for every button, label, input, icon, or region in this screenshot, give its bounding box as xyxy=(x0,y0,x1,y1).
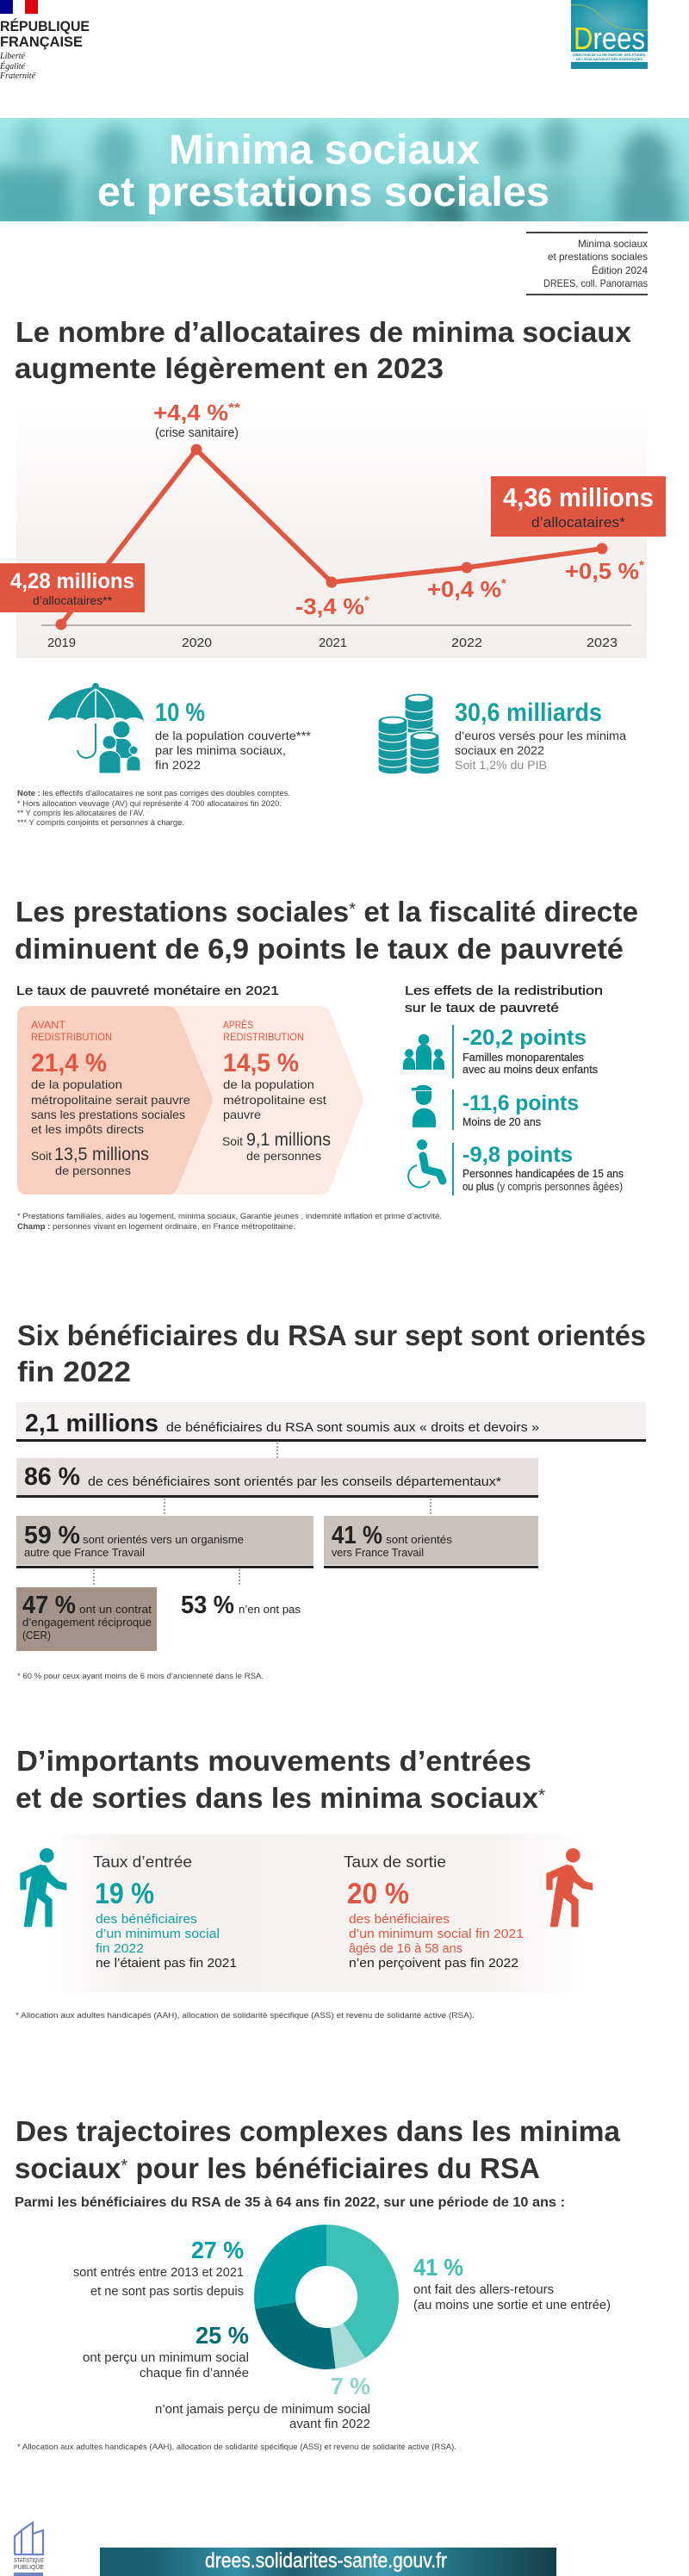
annotation: 2020 change: ** xyxy=(228,400,240,415)
flow: 41 % box xyxy=(324,1516,538,1568)
annotation: 2023 change: * xyxy=(639,558,644,573)
entry rate text: des bénéficiaires xyxy=(96,1913,197,1927)
label: 7 %: avant fin 2022 xyxy=(289,2418,370,2431)
heading: section 4: * xyxy=(538,1786,545,1805)
panel: before redistribution chevron: et les impôts directs xyxy=(31,1122,144,1136)
entry rate text: d’un minimum social xyxy=(96,1927,220,1941)
effect: under 20: Moins de 20 ans xyxy=(462,1116,541,1128)
icon: umbrella and family xyxy=(48,683,144,773)
footer: website banner: drees.solidarites-sante.gouv.fr xyxy=(205,2549,447,2573)
panel: before redistribution chevron: 13,5 millions xyxy=(54,1145,149,1164)
panel: after redistribution chevron: pauvre xyxy=(223,1108,261,1121)
label: 25 %: 25 % xyxy=(196,2322,249,2349)
panel: after redistribution chevron: 9,1 millions xyxy=(246,1130,331,1150)
notes: section 1: Note : les effectifs d’allocataires ne sont pas corrigés des doubles comptes. xyxy=(17,789,290,798)
effect: single-parent families: avec au moins deux enfants xyxy=(462,1064,598,1076)
publication reference block: et prestations sociales xyxy=(548,251,648,263)
stat: 10 % population covered: de la population couverte*** xyxy=(155,729,312,742)
heading: section 1 xyxy=(15,316,632,384)
flow: 59 % box: sont orientés vers un organisme xyxy=(83,1534,244,1546)
note: section 3: * 60 % pour ceux ayant moins de 6 mois d’ancienneté dans le RSA. xyxy=(17,1672,264,1681)
note: section 5: * Allocation aux adultes handicapés (AAH), allocation de solidarité spécifique (ASS) et revenu de solidarité active (RSA). xyxy=(17,2443,456,2452)
panel: entry and exit rates xyxy=(20,1834,593,1992)
panel: before redistribution chevron: de personnes xyxy=(55,1164,131,1177)
header: Drees logo: DE L'ÉVALUATION ET DES STATISTIQUES xyxy=(576,57,643,61)
heading: section 3: Six bénéficiaires du RSA sur sept sont orientés xyxy=(17,1319,646,1351)
panel: before redistribution chevron: AVANT xyxy=(31,1019,66,1031)
flow: 2,1 millions box xyxy=(16,1402,646,1442)
publication reference block: Édition 2024 xyxy=(592,264,648,276)
stat: 10 % population covered xyxy=(155,698,312,772)
effect: under 20 xyxy=(412,1085,579,1130)
callout: 2019 value xyxy=(0,563,145,612)
publication reference block: Minima sociaux xyxy=(578,238,648,250)
annotation: 2021 change: -3,4 % xyxy=(295,593,364,619)
entry rate text xyxy=(93,1853,237,1971)
line chart: number of recipients 2019-2023: 2020 xyxy=(182,636,212,650)
flow: 2,1 millions box: 2,1 millions xyxy=(25,1410,158,1437)
panel: after redistribution chevron: de la population xyxy=(223,1077,314,1091)
stat: 10 % population covered: fin 2022 xyxy=(155,758,201,772)
heading: section 3 xyxy=(17,1319,646,1387)
label: 27 %: sont entrés entre 2013 et 2021 xyxy=(73,2266,244,2280)
heading: section 4: et de sorties dans les minima sociaux xyxy=(16,1782,525,1814)
heading: section 5: sociaux xyxy=(15,2152,121,2184)
heading: section 1: Le nombre d’allocataires de minima sociaux xyxy=(16,316,632,348)
exit rate text: âgés de 16 à 58 ans xyxy=(349,1942,462,1956)
label: 7 % xyxy=(155,2373,370,2431)
label: 25 %: ont perçu un minimum social xyxy=(83,2351,249,2365)
label: 41 %: (au moins une sortie et une entrée) xyxy=(413,2299,611,2312)
heading: section 1: augmente légèrement en 2023 xyxy=(15,352,444,384)
label: 27 % xyxy=(73,2237,244,2299)
notes: section 1 xyxy=(17,789,290,828)
header: République française logo: RÉPUBLIQUE xyxy=(0,18,90,34)
effect: single-parent families: Familles monoparentales xyxy=(462,1052,584,1064)
panel: after redistribution chevron: Soit xyxy=(222,1134,243,1148)
donut chart: trajectories xyxy=(254,2225,399,2369)
notes: section 2: * Prestations familiales, aides au logement, minima sociaux, Garantie jeunes , indemnité inflation et prime d’activité. xyxy=(17,1212,442,1221)
annotation: 2021 change: * xyxy=(364,593,369,608)
flow: 86 % box: de ces bénéficiaires sont orientés par les conseils départementaux* xyxy=(88,1475,501,1489)
annotation: 2022 change: +0,4 % xyxy=(427,576,501,602)
stat: 10 % population covered: 10 % xyxy=(155,698,205,727)
flow: 59 % box: 59 % xyxy=(24,1522,80,1549)
exit rate text: 20 % xyxy=(347,1878,409,1910)
panel: before redistribution chevron: sans les prestations sociales xyxy=(31,1108,185,1121)
header: Drees logo: Drees xyxy=(574,21,645,56)
panel: after redistribution chevron: métropolitaine est xyxy=(223,1093,326,1107)
line chart: number of recipients 2019-2023: 2023 xyxy=(587,636,618,650)
heading: section 2: et la fiscalité directe xyxy=(356,896,638,928)
publication reference block xyxy=(526,232,648,295)
header: République française logo: Égalité xyxy=(0,61,26,71)
entry rate text: fin 2022 xyxy=(96,1942,144,1956)
header: République française logo: FRANÇAISE xyxy=(0,34,83,50)
exit rate text: Taux de sortie xyxy=(344,1853,446,1871)
heading: section 5 xyxy=(15,2115,621,2184)
effect: single-parent families xyxy=(403,1025,598,1078)
annotation: 2020 change xyxy=(153,400,240,440)
flow: 86 % box xyxy=(16,1458,538,1498)
flow: 59 % box xyxy=(16,1516,313,1568)
stat: 30,6 milliards xyxy=(455,698,626,772)
line chart: number of recipients 2019-2023 xyxy=(0,400,666,658)
label: 7 %: n’ont jamais perçu de minimum social xyxy=(155,2403,370,2417)
title banner xyxy=(0,116,689,228)
icon: walker entering xyxy=(20,1848,66,1927)
heading: section 4 xyxy=(16,1745,545,1814)
heading: section 5: * xyxy=(121,2157,127,2176)
panel: after redistribution chevron: APRÈS xyxy=(223,1018,253,1031)
subheading: section 5: Parmi les bénéficiaires du RSA de 35 à 64 ans fin 2022, sur une période de 10 ans : xyxy=(15,2195,565,2210)
exit rate text: n’en perçoivent pas fin 2022 xyxy=(349,1957,518,1971)
flow: 47 % box: d’engagement réciproque xyxy=(22,1617,152,1629)
panel: before redistribution chevron: Soit xyxy=(31,1149,52,1163)
subheading: redistribution effects xyxy=(405,984,603,1015)
icon: walker leaving xyxy=(546,1848,593,1927)
annotation: 2020 change: +4,4 % xyxy=(153,400,228,425)
entry rate text: 19 % xyxy=(95,1878,154,1910)
flow: 47 % box: ont un contrat xyxy=(79,1604,152,1616)
annotation: 2020 change: (crise sanitaire) xyxy=(155,425,239,440)
publication reference block: DREES, coll. Panoramas xyxy=(543,277,648,289)
panel: before redistribution chevron: REDISTRIBUTION xyxy=(31,1031,112,1043)
flow: 59 % box: autre que France Travail xyxy=(24,1547,145,1559)
heading: section 4: D’importants mouvements d’entrées xyxy=(16,1745,531,1777)
annotation: 2023 change: +0,5 % xyxy=(565,558,639,584)
line chart: number of recipients 2019-2023: 2021 xyxy=(319,636,347,650)
panel: before redistribution chevron xyxy=(17,1006,212,1195)
heading: section 2 xyxy=(15,896,638,965)
exit rate text xyxy=(344,1853,524,1971)
logo: statistique publique xyxy=(14,2523,44,2576)
exit rate text: des bénéficiaires xyxy=(349,1913,450,1927)
header: République française logo: Liberté xyxy=(0,51,26,61)
panel: after redistribution chevron: 14,5 % xyxy=(223,1049,299,1077)
effect: disabled people xyxy=(408,1139,624,1195)
label: 7 %: 7 % xyxy=(331,2373,370,2399)
title banner: et prestations sociales xyxy=(97,170,549,215)
effect: disabled people: ou plus (y compris personnes âgées) xyxy=(462,1181,623,1193)
callout: 2023 value: 4,36 millions xyxy=(503,482,654,512)
annotation: 2022 change: * xyxy=(501,576,506,591)
logo: statistique publique: PUBLIQUE xyxy=(14,2565,44,2571)
flow: 41 % box: sont orientés xyxy=(386,1534,452,1546)
label: 25 % xyxy=(83,2322,249,2380)
panel: before redistribution chevron: de la population xyxy=(31,1077,122,1091)
notes: section 2: Champ : personnes vivant en logement ordinaire, en France métropolitaine. xyxy=(17,1222,295,1232)
label: 27 %: et ne sont pas sortis depuis xyxy=(90,2285,244,2299)
panel: after redistribution chevron: REDISTRIBUTION xyxy=(223,1031,304,1043)
flow: 86 % box: 86 % xyxy=(24,1463,80,1491)
flow: 47 % box: (CER) xyxy=(22,1629,51,1642)
notes: section 1: ** Y compris les allocataires de l’AV. xyxy=(17,809,145,818)
line chart: number of recipients 2019-2023: 2019 xyxy=(47,636,76,650)
note: section 4: * Allocation aux adultes handicapés (AAH), allocation de solidarité spécifique (ASS) et revenu de solidarité active (RSA). xyxy=(16,2011,475,2020)
flow: 53 % text: 53 % xyxy=(181,1592,234,1619)
logo: statistique publique: STATISTIQUE xyxy=(14,2558,44,2564)
label: 25 %: chaque fin d’année xyxy=(140,2367,249,2380)
notes: section 2 xyxy=(17,1212,442,1232)
entry rate text: Taux d’entrée xyxy=(93,1853,192,1871)
callout: 2023 value xyxy=(491,476,666,537)
effect: disabled people: Personnes handicapées de 15 ans xyxy=(462,1168,624,1180)
effect: disabled people: -9,8 points xyxy=(462,1143,573,1167)
panel: after redistribution chevron xyxy=(17,1006,363,1195)
flow: 41 % box: 41 % xyxy=(332,1522,382,1549)
stat: 30,6 milliards: sociaux en 2022 xyxy=(455,743,544,757)
heading: section 2: diminuent de 6,9 points le taux de pauvreté xyxy=(15,933,624,965)
icon: coin stacks xyxy=(378,693,439,774)
header: République française logo: Fraternité xyxy=(0,71,36,81)
footer: website banner xyxy=(100,2548,556,2576)
subheading: redistribution effects: sur le taux de pauvreté xyxy=(405,1001,559,1015)
effect: under 20: -11,6 points xyxy=(462,1091,579,1115)
header: République française logo xyxy=(0,0,90,81)
panel: before redistribution chevron: métropolitaine serait pauvre xyxy=(31,1093,190,1107)
flow: 53 % text: n’en ont pas xyxy=(239,1604,301,1616)
flow: 53 % text xyxy=(181,1592,301,1619)
subheading: redistribution effects: Les effets de la redistribution xyxy=(405,984,603,998)
callout: 2019 value: d’allocataires** xyxy=(33,593,113,607)
flow: 2,1 millions box: de bénéficiaires du RSA sont soumis aux « droits et devoirs » xyxy=(166,1421,539,1435)
notes: section 1: *** Y compris conjoints et personnes à charge. xyxy=(17,818,184,828)
stat: 30,6 milliards: 30,6 milliards xyxy=(455,698,602,727)
title banner: Minima sociaux xyxy=(169,127,480,173)
header: Drees logo: DIRECTION DE LA RECHERCHE, DES ÉTUDES, xyxy=(573,53,646,57)
heading: section 2: Les prestations sociales xyxy=(16,896,345,928)
label: 41 %: ont fait des allers-retours xyxy=(413,2283,554,2297)
stat: 30,6 milliards: Soit 1,2% du PIB xyxy=(455,758,547,772)
flow: 47 % box xyxy=(16,1587,157,1651)
entry rate text: ne l’étaient pas fin 2021 xyxy=(96,1957,237,1971)
subheading: poverty rate: Le taux de pauvreté monétaire en 2021 xyxy=(16,984,279,998)
label: 27 %: 27 % xyxy=(191,2237,244,2263)
header: Drees logo xyxy=(571,0,648,69)
panel: after redistribution chevron: de personnes xyxy=(246,1149,321,1163)
label: 41 %: 41 % xyxy=(413,2254,463,2281)
callout: 2023 value: d’allocataires* xyxy=(531,514,625,531)
panel: before redistribution chevron: 21,4 % xyxy=(31,1049,107,1077)
heading: section 3: fin 2022 xyxy=(17,1356,131,1387)
heading: section 5: Des trajectoires complexes dans les minima xyxy=(16,2115,621,2147)
stat: 10 % population covered: par les minima sociaux, xyxy=(155,743,286,757)
label: 41 % xyxy=(413,2254,611,2312)
heading: section 5: pour les bénéficiaires du RSA xyxy=(127,2152,540,2184)
stat: 30,6 milliards: d’euros versés pour les minima xyxy=(455,729,626,742)
exit rate text: d’un minimum social fin 2021 xyxy=(349,1927,524,1941)
heading: section 2: * xyxy=(349,900,356,919)
effect: single-parent families: -20,2 points xyxy=(462,1026,587,1050)
notes: section 1: * Hors allocation veuvage (AV) qui représente 4 700 allocataires fin 2020. xyxy=(17,799,282,809)
flow: 41 % box: vers France Travail xyxy=(332,1547,424,1559)
line chart: number of recipients 2019-2023: 2022 xyxy=(451,636,482,650)
callout: 2019 value: 4,28 millions xyxy=(10,569,134,593)
flow: 47 % box: 47 % xyxy=(22,1592,76,1619)
